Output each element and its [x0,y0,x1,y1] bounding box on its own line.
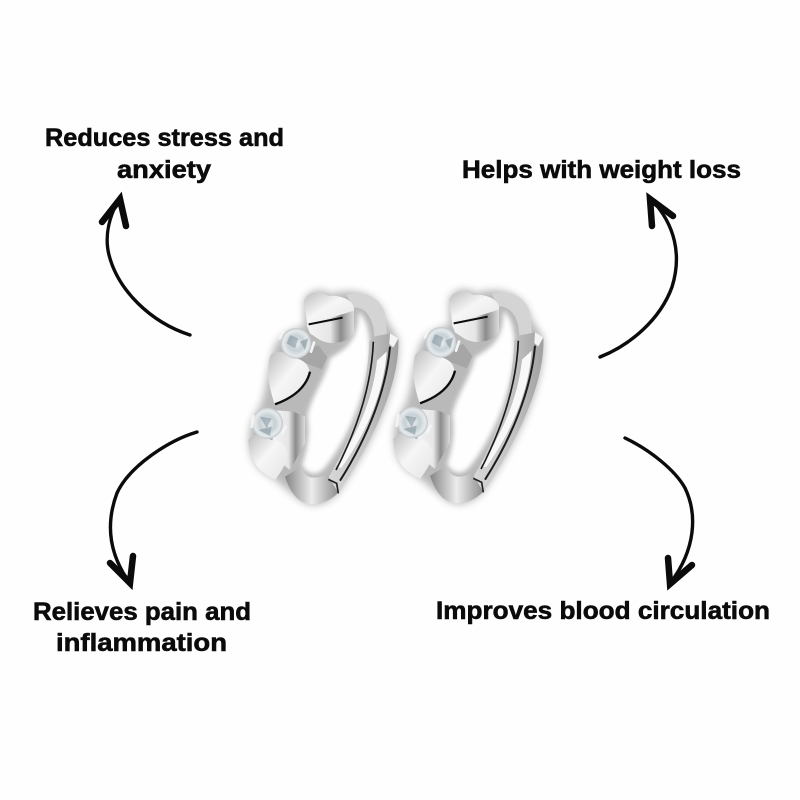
arrow: to pain relief [110,432,197,583]
arrow: to weight loss [600,199,676,357]
arrow: to blood circulation [625,438,693,584]
heading: helps with weight loss: Helps with weight loss [462,156,741,184]
heading: improves blood circulation: Improves blood circulation [436,597,770,625]
icon: right earring [393,289,544,504]
heading: relieves pain and inflammation [33,598,251,657]
arrow: to reduces stress [102,199,190,335]
heading: reduces stress and anxiety: Reduces stress and [45,124,284,152]
heading: reduces stress and anxiety [45,124,284,184]
heading: relieves pain and inflammation: inflammation [56,629,227,657]
icon: left earring [248,290,399,505]
heading: reduces stress and anxiety: anxiety [117,156,211,184]
heading: relieves pain and inflammation: Relieves pain and [33,598,251,626]
